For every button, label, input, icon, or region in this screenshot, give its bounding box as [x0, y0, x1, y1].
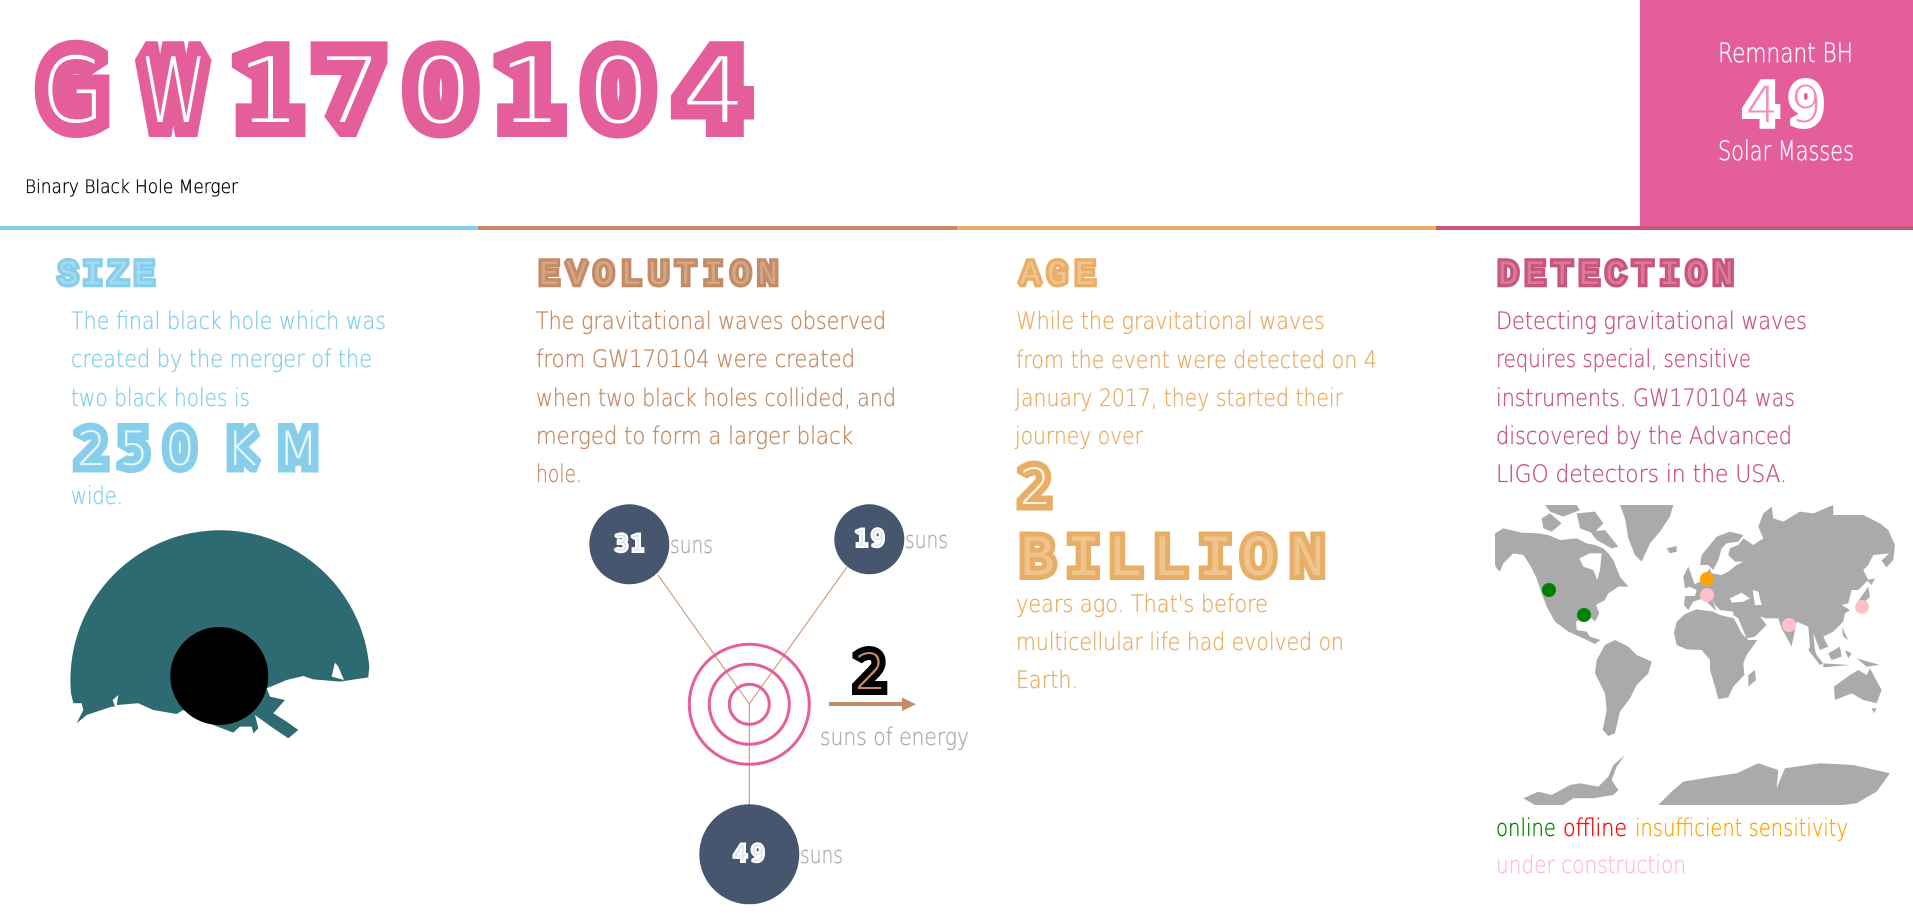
age text: January 2017, they started their — [1015, 384, 1343, 412]
stat: 250 km: 250 KM — [77, 422, 319, 477]
gravitational wave rings — [689, 644, 809, 764]
black hole: 49 suns — [699, 804, 843, 904]
map legend: insufficient sensitivity — [1635, 814, 1848, 842]
stat: 2 billion — [1020, 458, 1325, 593]
size text — [71, 307, 386, 510]
black hole: 49 suns: 49 — [734, 842, 764, 866]
panel: size — [58, 257, 386, 738]
section colour bars — [0, 226, 1913, 230]
remnant label: Remnant BH — [1718, 38, 1853, 69]
heading: detection: DETECTION — [1498, 257, 1733, 295]
detection text: Detecting gravitational waves — [1496, 307, 1807, 335]
map legend — [1496, 814, 1848, 879]
age text: While the gravitational waves — [1016, 307, 1325, 335]
title: 1 — [238, 39, 300, 144]
age text: from the event were detected on 4 — [1016, 346, 1377, 374]
size text: created by the merger of the — [71, 345, 372, 373]
panel: age — [1014, 257, 1377, 694]
age text: Earth. — [1016, 666, 1078, 694]
size text: The final black hole which was — [71, 307, 386, 335]
evolution text: The gravitational waves observed — [536, 307, 886, 335]
black hole: 49 suns: suns — [800, 841, 843, 869]
title: 0 — [410, 39, 472, 144]
panel: evolution — [536, 257, 969, 904]
size text: wide. — [71, 482, 123, 510]
map legend: under construction — [1496, 851, 1686, 879]
black hole: 19 suns — [834, 504, 948, 574]
panel: header — [25, 39, 746, 198]
black hole over coastline — [70, 530, 369, 738]
subtitle: Binary Black Hole Merger — [25, 176, 238, 198]
evolution text — [536, 307, 896, 488]
panel: detection — [1495, 257, 1895, 879]
energy arrow — [829, 698, 916, 711]
title: W — [141, 39, 207, 144]
world map — [1495, 505, 1895, 805]
energy label: suns of energy — [820, 723, 969, 751]
black hole: 19 suns: suns — [905, 526, 948, 554]
title: 0 — [587, 39, 650, 144]
evolution text: hole. — [536, 460, 582, 488]
detection text — [1496, 307, 1807, 488]
age text: years ago. That's before — [1016, 590, 1268, 618]
panel: remnant black hole — [1640, 0, 1913, 226]
heading: size: SIZE — [58, 257, 154, 295]
age text: multicellular life had evolved on — [1016, 628, 1344, 656]
heading: evolution: EVOLUTION — [539, 257, 778, 295]
detector markers — [1542, 572, 1869, 632]
evolution text: merged to form a larger black — [536, 422, 853, 450]
stat: 2 billion: 2 — [1020, 458, 1051, 516]
detection text: requires special, sensitive — [1496, 345, 1751, 373]
evolution text: when two black holes collided, and — [536, 384, 896, 412]
map legend: offline — [1563, 814, 1627, 842]
title: 4 — [682, 39, 746, 144]
age text — [1014, 307, 1377, 694]
heading: age: AGE — [1020, 257, 1095, 295]
stat: 2 billion: BILLION — [1020, 528, 1325, 593]
merger diagram — [589, 504, 969, 904]
detection text: LIGO detectors in the USA. — [1496, 460, 1787, 488]
remnant mass number: 49 — [1746, 76, 1822, 134]
black hole: 31 suns: suns — [670, 531, 713, 559]
black hole: 31 suns — [589, 504, 713, 584]
detection text: instruments. GW170104 was — [1496, 384, 1795, 412]
age text: journey over — [1014, 422, 1143, 450]
title: 1 — [499, 39, 562, 144]
energy number: 2 — [854, 643, 886, 701]
detection text: discovered by the Advanced — [1496, 422, 1792, 450]
title: 7 — [319, 39, 382, 144]
remnant unit: Solar Masses — [1718, 136, 1854, 167]
evolution text: from GW170104 were created — [536, 345, 855, 373]
title: G — [42, 39, 104, 144]
black hole: 31 suns: 31 — [615, 532, 644, 556]
black hole: 19 suns: 19 — [855, 526, 884, 550]
map legend: online — [1496, 814, 1556, 842]
size text: two black holes is — [71, 384, 250, 412]
